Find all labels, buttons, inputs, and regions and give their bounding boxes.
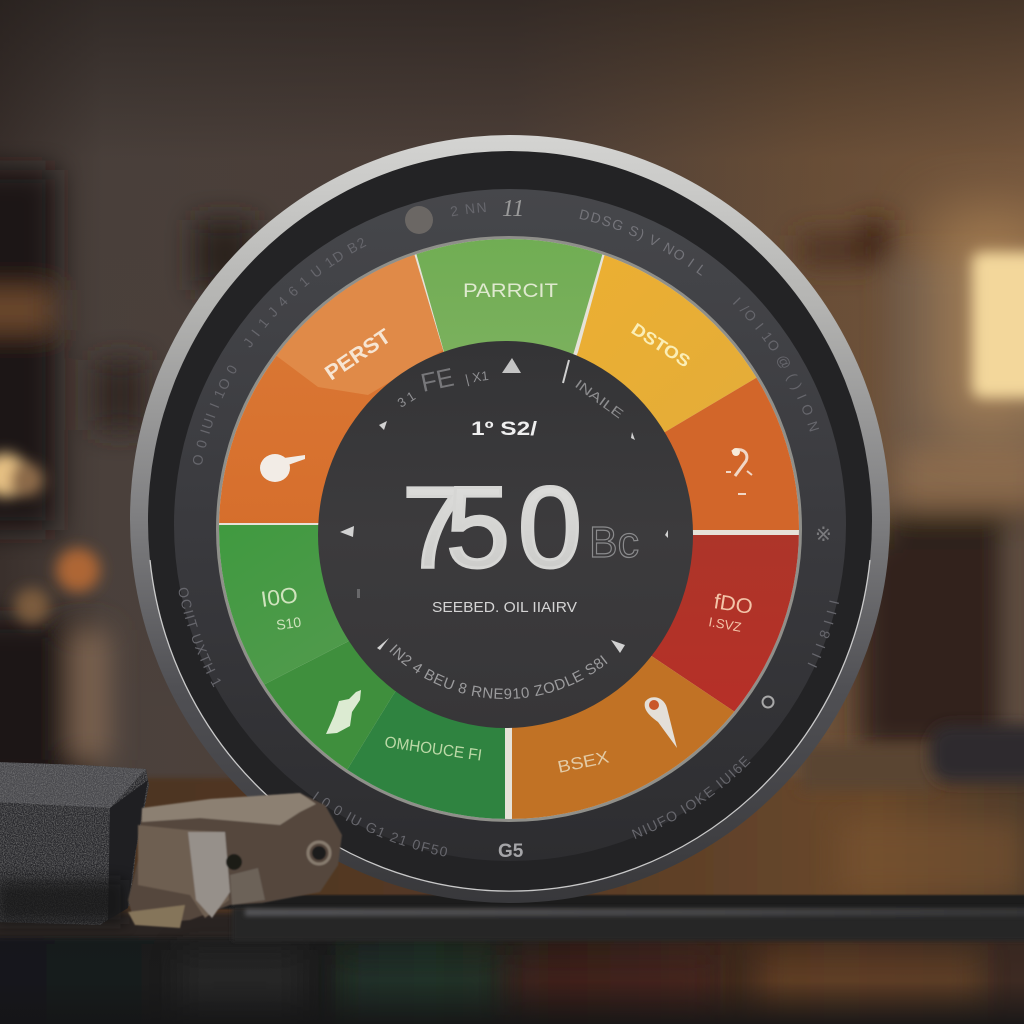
- ring marker circle: [405, 206, 433, 234]
- ring small open circle: [762, 696, 774, 708]
- icon: white figure on green: [326, 690, 361, 734]
- centre triangle marker: [502, 358, 521, 373]
- label: 100 on left green: I0O: [259, 582, 299, 612]
- label: OMHOUCE FI: OMHOUCE FI: [383, 734, 483, 765]
- ring inscriptions: OCIIT UXTH 1: [178, 588, 221, 688]
- ring inscriptions: NIUFO IOKE IUI6E: [632, 756, 750, 839]
- label: PERST: PERST: [321, 325, 395, 385]
- segment labels: [259, 281, 754, 777]
- ring star glyph: ※: [815, 524, 832, 546]
- centre top inscriptions: [395, 360, 627, 422]
- worn rock foreground: [128, 793, 342, 928]
- ring numeral 11: 11: [502, 196, 524, 222]
- segment: dark green: [347, 691, 505, 819]
- icon: pin on bottom orange: [645, 697, 677, 748]
- segment: bottom orange: [512, 656, 734, 819]
- dark mat strip: [215, 895, 1024, 941]
- big score 750: 0: [518, 464, 582, 592]
- ring inscriptions: I /O I 1O @ ( ) I O N: [733, 297, 819, 432]
- big score 750: [402, 464, 582, 592]
- segment: middle green: [264, 640, 396, 770]
- lamp glow: [930, 210, 1024, 440]
- segment: right orange: [664, 378, 799, 530]
- icon: question mark on orange: [726, 448, 752, 494]
- centre top inscriptions: | X1: [465, 371, 488, 386]
- segment: top green: [416, 239, 602, 354]
- metal outer rim: [130, 135, 890, 903]
- blurred room background: [0, 0, 1024, 790]
- segment: upper left orange: [219, 255, 444, 523]
- label: PARRCIT: PARRCIT: [463, 281, 558, 302]
- big score 750: 5: [446, 464, 510, 592]
- label: LEVR on red: I.SVZ: [707, 614, 743, 635]
- dial body: [130, 135, 890, 903]
- centre top inscriptions: FE: [418, 362, 457, 398]
- coloured segments: [219, 239, 799, 819]
- dark inner bezel: [148, 151, 872, 891]
- table foreground: [0, 938, 1024, 1024]
- centre small heading: 1º S2/: [471, 419, 538, 440]
- ring numeral G5: G5: [498, 841, 524, 862]
- icon: white fruit on orange: [260, 454, 305, 482]
- ring inscriptions: [178, 202, 839, 856]
- segment: red: [652, 535, 799, 712]
- label: 510 on left green: S10: [275, 614, 302, 633]
- label: BSEX: BSEX: [556, 748, 611, 777]
- grey text band: [174, 189, 846, 861]
- segment: left green: [219, 525, 349, 684]
- ring inscriptions: I 0 0 IU G1 21 0F50: [312, 792, 447, 856]
- big score 750: 7: [402, 464, 466, 592]
- centre top inscriptions: 3 1: [395, 388, 418, 411]
- wooden floor: [0, 725, 1024, 913]
- thin rim highlight: [150, 560, 870, 891]
- black block foreground: [0, 762, 149, 925]
- segment: yellow: [576, 255, 756, 432]
- label: DSTOS: DSTOS: [628, 319, 694, 371]
- centre caption: SEEBED. OIL IIAIRV: [432, 599, 577, 616]
- ring inscriptions: O 0 IUI I 1O 0: [193, 366, 236, 465]
- left bokeh lights: [0, 453, 100, 624]
- centre top inscriptions: INAILE: [572, 376, 627, 422]
- coloured segments border: [216, 236, 802, 822]
- ring inscriptions: DDSG S) V NO I L: [580, 210, 703, 276]
- ring inscriptions: J I 1 J 4 6 1 U 1D B2: [244, 238, 366, 348]
- centre disc: [318, 341, 693, 728]
- centre tick marks: [340, 421, 668, 653]
- ring inscriptions: 2 NN: [450, 202, 486, 216]
- label: 100 on red: fDO: [712, 590, 754, 619]
- centre bottom arc text: IN2 4 BEU 8 RNE910 ZODLE S8I: [390, 644, 608, 700]
- score unit scribble: Bc: [589, 518, 639, 567]
- ring inscriptions: I I I 8 I I I: [808, 600, 839, 668]
